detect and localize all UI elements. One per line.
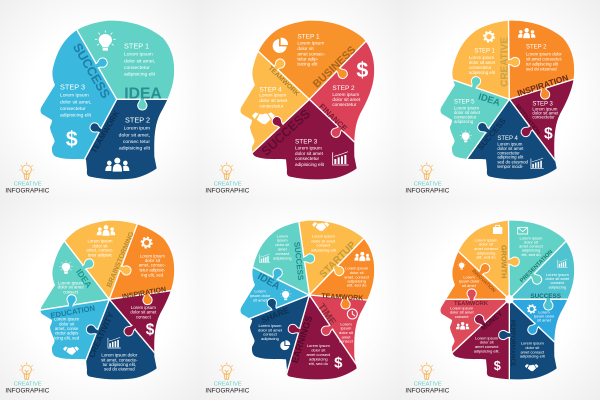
step 5 text: consectetur — [454, 114, 477, 119]
blue piece text: sit amet — [537, 318, 552, 323]
pink piece text: ipsum — [341, 326, 352, 331]
step 3 text: consectetur — [60, 106, 86, 112]
icon: chart — [333, 152, 349, 165]
keyword: INSPIRATION: INSPIRATION — [122, 286, 167, 301]
blue piece text: ipsum dolor — [250, 293, 271, 298]
keyword: SHARE: SHARE — [260, 305, 291, 325]
head puzzle pieces — [40, 220, 174, 380]
step 1 text: adipiscing elit — [469, 70, 496, 75]
orange piece text: ipsum dolor — [459, 279, 480, 284]
step 4 text: consectetur — [497, 150, 520, 155]
step 2 text: sit amet consectet- — [526, 56, 563, 61]
cyan piece text: Lorem ipsum — [546, 272, 569, 277]
logo — [405, 163, 450, 195]
keyword: CREATIVITY: CREATIVITY — [86, 310, 116, 359]
icon: handshake — [252, 112, 275, 124]
red piece text: consect — [455, 314, 469, 319]
step 1 text: Lorem ipsum — [297, 41, 324, 46]
icon: people — [105, 158, 129, 172]
step 2 text: STEP 2 — [332, 85, 355, 92]
yellow piece text: adipisicing — [477, 250, 495, 255]
keyword: TIME: TIME — [315, 302, 338, 328]
step 1 text: consectetur — [124, 65, 150, 71]
icon: dollar: $ — [544, 126, 553, 143]
icon: envelope — [518, 227, 528, 234]
step 4 text: consectetur — [259, 104, 284, 109]
keyword: SUCCESS: SUCCESS — [70, 41, 113, 101]
step 2 text: STEP 2 — [526, 44, 547, 50]
step 3 text: STEP 3 — [60, 82, 85, 91]
icon: bulb — [95, 30, 116, 51]
icon: handshake — [63, 346, 79, 355]
yellow piece text: Lorem ipsum — [312, 234, 335, 239]
step 2 body: Lorem ipum — [124, 126, 150, 132]
step 1 text: Lorem ipsum — [469, 55, 494, 60]
blue piece text: Lorem ipsum — [54, 317, 79, 322]
maroon piece text: elit, sed do — [309, 361, 329, 366]
step 3 text: Lorem ipsum — [60, 93, 89, 99]
maroon piece text: Lorem ipsum — [131, 305, 156, 310]
step 5 text: adipiscing — [454, 119, 474, 124]
step 3 text: dolor sit amet — [532, 111, 559, 116]
step 2 text: Lorem ipsum — [332, 92, 359, 97]
teal piece text: Lorem — [277, 234, 288, 239]
cyan piece text: consect — [550, 280, 565, 285]
teal piece text: dolor sit — [275, 242, 290, 247]
orange piece text: tetur adipisic- — [139, 267, 166, 272]
icon: bulb — [280, 289, 291, 300]
yellow piece text: Lorem ipsum — [87, 238, 113, 243]
step 1 text: STEP 1 — [124, 41, 149, 50]
blue piece text: Lorem — [254, 289, 266, 294]
panel: four-step head — [206, 20, 374, 192]
step 4 text: dolor sit amet — [497, 146, 524, 151]
step 1 text: adipisicing elit — [124, 72, 156, 78]
navy piece text: sit amet, consecte- — [101, 357, 138, 362]
icon: gear — [484, 32, 494, 42]
step 1 text: dolor sit amet, — [124, 58, 155, 64]
step 1 text: consectetur — [469, 65, 492, 70]
yellow piece text: tetur adipisic — [88, 253, 113, 258]
keyword: FINANCE: FINANCE — [317, 102, 349, 134]
orange piece text: amet, consect — [344, 274, 370, 279]
keyword: SUCCESS: SUCCESS — [530, 293, 561, 300]
teal piece text: ipsum — [277, 238, 288, 243]
head puzzle pieces — [40, 20, 174, 180]
maroon piece text: amet consect — [475, 344, 499, 349]
step 1 text: amet consec- — [297, 51, 326, 56]
logo — [5, 163, 50, 195]
blue piece text: dolor sit — [59, 321, 75, 326]
pink piece text: dolor sit — [339, 330, 354, 335]
yellow piece text: dolor sit amet — [311, 238, 336, 243]
step 4 text: STEP 4 — [497, 136, 518, 142]
keyword: MONEY: MONEY — [480, 310, 505, 332]
teal piece text: elit, sed do — [521, 252, 541, 257]
blue piece text: sit amet — [253, 297, 268, 302]
pink piece text: Lorem — [340, 321, 352, 326]
navy piece text: adipiscing — [261, 336, 279, 341]
yellow piece text: elit, sed do — [476, 255, 496, 260]
step 3 text: dolor sit amet — [295, 151, 324, 156]
step 2 text: sed do eiusmod — [526, 67, 557, 72]
step 2 body: dolor sit amet, — [119, 132, 150, 138]
panel: three-step head — [6, 20, 174, 192]
maroon piece text: Lorem ipsum — [475, 335, 498, 340]
panel: eight-step head — [406, 220, 574, 392]
step 3 text: consectetur — [532, 115, 555, 120]
yellow piece text: amet consect — [474, 246, 499, 251]
step 3 text: STEP 3 — [295, 138, 317, 145]
teal piece text: dolor sit amet — [58, 285, 84, 290]
keyword: SUCCESS: SUCCESS — [259, 107, 313, 159]
navy piece text: amet consect — [520, 349, 545, 354]
blue piece text: ctetur adipis — [55, 331, 78, 336]
logo — [205, 163, 250, 195]
red piece text: Lorem ipsum — [450, 305, 473, 310]
icon: gear — [528, 305, 536, 313]
teal piece text: amet consect — [519, 244, 544, 249]
step 4 text: dolor sit amet — [259, 98, 288, 103]
teal piece text: adipisicing — [522, 248, 540, 253]
pink piece text: consect — [339, 339, 354, 344]
head puzzle pieces — [240, 220, 374, 380]
navy piece text: dolor sit — [525, 345, 540, 350]
head puzzle pieces — [440, 20, 574, 180]
orange piece text: dolor sit — [145, 258, 161, 263]
keyword: SUCCESS: SUCCESS — [476, 116, 508, 152]
icon: gear — [142, 238, 152, 248]
step 2 text: tur adipiscing elit — [526, 61, 559, 66]
icon: dollar: $ — [146, 322, 155, 339]
teal piece text: Lorem ipsum — [519, 235, 543, 240]
panel: seven-step head — [206, 220, 374, 392]
step 5 text: STEP 5 — [454, 100, 475, 106]
logo — [5, 363, 50, 395]
icon: briefcase — [493, 225, 502, 234]
pink piece text: amet — [342, 334, 351, 339]
icon: people — [518, 28, 535, 38]
blue piece text: ipsum dolor — [534, 313, 555, 318]
icon: chart — [108, 337, 121, 348]
orange piece text: adipisicing — [347, 279, 366, 284]
icon: people — [97, 225, 115, 236]
yellow piece text: consect — [316, 243, 331, 248]
blue piece text: icing elit, sed — [54, 335, 80, 340]
icon: dollar: $ — [334, 355, 343, 372]
cyan piece text: dolor sit amet — [545, 276, 570, 281]
step 1 text: tetur adip- — [297, 56, 319, 61]
yellow piece text: dolor sit — [92, 243, 108, 248]
orange piece text: dolor sit — [350, 270, 365, 275]
maroon piece text: consect — [136, 314, 152, 319]
keyword: PRESENTATION: PRESENTATION — [519, 249, 554, 284]
step 1 text: dolor sit — [297, 46, 314, 51]
orange piece text: ing elit, sed — [141, 272, 164, 277]
icon: chart — [558, 259, 568, 267]
step 3 text: dolor sit amet, — [60, 99, 91, 105]
logo — [405, 363, 450, 395]
orange piece text: Lorem — [463, 275, 475, 280]
teal piece text: adipisicing — [273, 255, 292, 260]
step 3 text: adipisicing elit — [295, 162, 325, 167]
keyword: CREATIVE: CREATIVE — [500, 37, 511, 87]
icon: dollar: $ — [66, 127, 78, 151]
step 1 text: STEP 1 — [297, 33, 320, 40]
keyword: TEAMWORK: TEAMWORK — [454, 301, 489, 307]
icon: dollar: $ — [494, 359, 501, 373]
keyword: IDEA: IDEA — [124, 85, 162, 102]
keyword: GROWTH: GROWTH — [499, 245, 508, 278]
step 3 text: Lorem ipsum — [532, 107, 558, 112]
navy piece text: Lorem ipsum — [258, 323, 282, 328]
keyword: BUSINESS: BUSINESS — [311, 44, 358, 90]
navy piece text: Lorem ipsum dolor — [101, 353, 137, 358]
step 3 text: Lorem ipsum — [295, 145, 322, 150]
keyword: TEAMWORK: TEAMWORK — [321, 293, 363, 302]
step 3 text: consectetur — [295, 156, 320, 161]
step 2 heading: STEP 2 — [125, 116, 150, 125]
step 2 body: consec tetur — [123, 139, 150, 145]
navy piece text: tur adipiscing elit, — [103, 362, 136, 367]
logo — [205, 363, 250, 395]
step 4 text: sed do eiusmod — [497, 159, 528, 164]
step 3 text: STEP 3 — [532, 101, 553, 107]
yellow piece text: adipisicing elit — [311, 247, 337, 252]
orange piece text: Lorem ipsum — [140, 253, 165, 258]
navy piece text: consect — [263, 332, 278, 337]
keyword: EARNINGS: EARNINGS — [290, 314, 314, 364]
keyword: STARTUP: STARTUP — [318, 240, 359, 280]
keyword: TEAMWORK: TEAMWORK — [89, 109, 122, 155]
icon: chart — [260, 254, 270, 263]
maroon piece text: adipisicing elit. — [474, 349, 500, 354]
keyword: MOTIVATION: MOTIVATION — [514, 104, 541, 136]
teal piece text: Lorem ipsum — [58, 280, 83, 285]
red piece text: dolor sit amet — [450, 310, 475, 315]
blue piece text: Lorem — [538, 309, 550, 314]
maroon piece text: amet consect — [306, 352, 331, 357]
navy piece text: Lorem ipsum — [521, 341, 544, 346]
teal piece text: amet — [278, 247, 288, 252]
step 2 text: consectetur — [332, 102, 357, 107]
step 4 text: tempor incidi- — [497, 164, 524, 169]
step 5 text: Lorem ipsum — [454, 106, 479, 111]
orange piece text: elit, sed do — [347, 283, 367, 288]
keyword: INSPIRATION: INSPIRATION — [516, 72, 569, 98]
keyword: IDEA: IDEA — [255, 271, 282, 293]
step 4 text: adipiscing elit — [497, 155, 524, 160]
icon: pie chart — [273, 38, 288, 53]
keyword: IDEA: IDEA — [74, 267, 94, 290]
yellow piece text: dolor sit — [479, 242, 494, 247]
step 4 text: Lorem ipsum — [259, 93, 286, 98]
step 2 text: Lorem ipsum dolor — [526, 51, 562, 56]
icon: dollar: $ — [356, 58, 368, 82]
navy piece text: dolor sit amet — [258, 327, 283, 332]
step 2 body: adipisicing elit — [119, 146, 151, 152]
keyword: SUCCESS: SUCCESS — [292, 241, 305, 281]
panel: five-step head — [406, 20, 574, 192]
step 4 text: Lorem ipsum — [497, 141, 523, 146]
orange piece text: Lorem ipsum — [345, 266, 368, 271]
navy piece text: sed do eiusmod — [104, 367, 135, 372]
yellow piece text: amet, consec- — [86, 248, 114, 253]
icon: handshake — [525, 364, 538, 371]
icon: handshake — [312, 222, 329, 231]
maroon piece text: adipisicing — [309, 356, 328, 361]
step 5 text: dolor sit amet — [454, 110, 481, 115]
icon: bulb — [457, 261, 466, 270]
teal piece text: consect — [275, 251, 290, 256]
icon: people — [354, 252, 370, 261]
icon: people — [456, 322, 469, 330]
step 1 text: isicing elit — [297, 61, 318, 66]
orange piece text: amet, consec- — [139, 263, 166, 268]
cyan piece text: adipiscing — [548, 284, 566, 289]
icon: pie chart — [280, 340, 290, 350]
navy piece text: adipisicing elit — [520, 353, 546, 358]
teal piece text: dolor sit — [524, 240, 539, 245]
blue piece text: amet, conse — [55, 326, 79, 331]
keyword: IDEA: IDEA — [477, 91, 502, 108]
keyword: PERFORMANCE: PERFORMANCE — [509, 320, 515, 367]
maroon piece text: dolor sit — [480, 340, 495, 345]
icon: chart — [531, 158, 544, 169]
keyword: EDUCATION: EDUCATION — [50, 303, 96, 320]
maroon piece text: dolor sit amet — [130, 310, 157, 315]
step 3 text: adipisicing elit — [60, 113, 92, 119]
keyword: TEAMWORK: TEAMWORK — [267, 65, 300, 98]
icon: bulb — [59, 261, 73, 274]
icon: clock — [347, 309, 357, 319]
icon: bulb — [459, 130, 472, 142]
maroon piece text: Lorem ipsum — [307, 343, 330, 348]
step 1 text: dolor sit amet — [469, 60, 496, 65]
orange piece text: sit amet — [462, 283, 477, 288]
head puzzle pieces — [440, 220, 574, 380]
teal piece text: consect — [63, 289, 79, 294]
step 1 text: Lorem ipsum — [124, 52, 153, 58]
step 2 text: dolor sit amet — [332, 97, 361, 102]
step 1 text: STEP 1 — [474, 49, 495, 55]
head puzzle pieces — [240, 20, 374, 180]
maroon piece text: dolor sit — [311, 347, 326, 352]
keyword: BRAINSTORMING: BRAINSTORMING — [106, 231, 136, 289]
step 4 text: STEP 4 — [259, 86, 282, 93]
panel: six-step head — [6, 220, 174, 392]
yellow piece text: Lorem ipsum — [474, 237, 498, 242]
keyword: INNOVATION: INNOVATION — [470, 268, 497, 294]
